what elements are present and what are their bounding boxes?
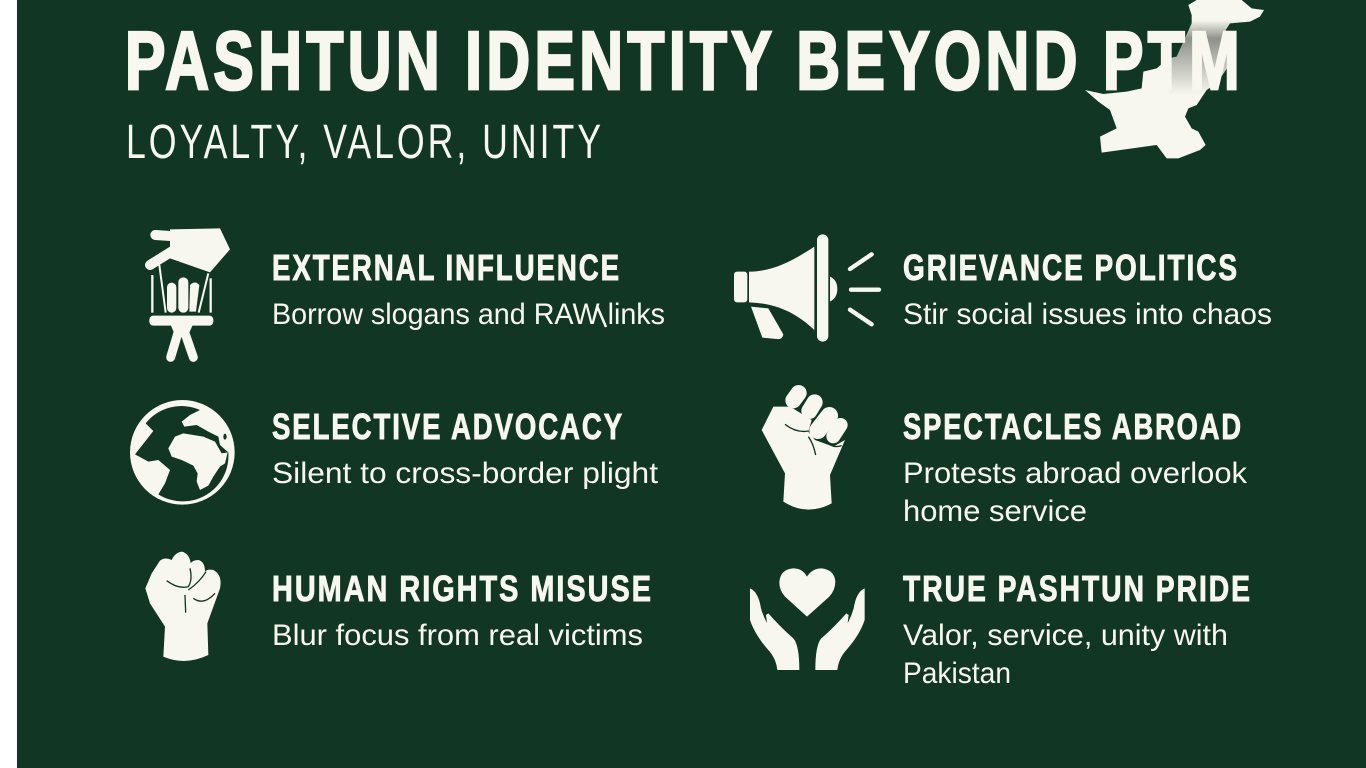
item: spectacles abroad bbox=[762, 393, 1248, 528]
icon: megaphone bbox=[734, 234, 879, 342]
item: grievance politics bbox=[734, 234, 1272, 342]
description line 2: Pakistan bbox=[903, 657, 1011, 690]
description: Borrow slogans and RAW links bbox=[272, 298, 665, 331]
icon: clenched fist bbox=[762, 393, 845, 510]
description line 2: home service bbox=[903, 495, 1087, 528]
item: external influence bbox=[149, 228, 665, 357]
heading: HUMAN RIGHTS MISUSE bbox=[272, 568, 653, 609]
description: Protests abroad overlook bbox=[903, 457, 1248, 490]
icon: raised fist bbox=[145, 552, 221, 661]
heading: EXTERNAL INFLUENCE bbox=[272, 247, 621, 288]
subtitle: LOYALTY, VALOR, UNITY bbox=[126, 116, 604, 169]
description: Valor, service, unity with bbox=[903, 619, 1228, 652]
icon: hands holding heart bbox=[750, 568, 865, 670]
heading: SPECTACLES ABROAD bbox=[903, 406, 1243, 447]
description: Blur focus from real victims bbox=[272, 619, 643, 652]
item: true pashtun pride bbox=[750, 568, 1252, 690]
heading: SELECTIVE ADVOCACY bbox=[272, 406, 624, 447]
description: Silent to cross-border plight bbox=[272, 457, 659, 490]
heading: TRUE PASHTUN PRIDE bbox=[903, 568, 1252, 609]
icon: map of Pakistan bbox=[1085, 0, 1264, 158]
heading: GRIEVANCE POLITICS bbox=[903, 247, 1239, 288]
item: selective advocacy bbox=[130, 400, 659, 505]
description: Stir social issues into chaos bbox=[903, 298, 1272, 331]
item: human rights misuse bbox=[145, 552, 653, 661]
icon: puppet hand bbox=[149, 228, 230, 357]
icon: globe bbox=[130, 400, 235, 505]
glitch mark bbox=[597, 306, 606, 327]
